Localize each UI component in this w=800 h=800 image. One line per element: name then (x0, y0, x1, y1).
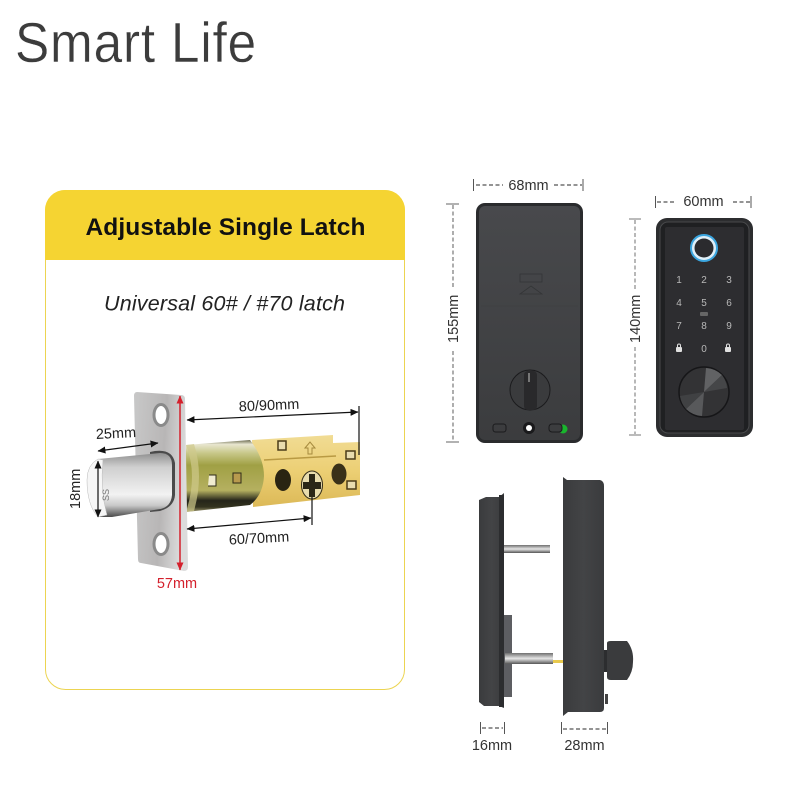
dimension: 16mm (472, 722, 512, 754)
dimension: 68mm (474, 178, 583, 194)
keypad rotary knob (679, 367, 729, 417)
back panel arrow mark (520, 274, 542, 294)
panel: adjustable single latch (45, 190, 405, 690)
keypad lock icons (676, 344, 731, 352)
keypad digits: 4 (676, 298, 682, 309)
dimension: 68mm: 68mm (508, 178, 549, 194)
keypad digits: 9 (726, 321, 732, 332)
panel heading: Adjustable Single Latch (86, 214, 366, 241)
dimension: 28mm (562, 722, 608, 754)
dimension: 80/90mm (187, 397, 359, 455)
keypad digits: 5 (701, 298, 707, 309)
keypad digits (676, 275, 732, 355)
dimension: 28mm: 28mm (564, 738, 605, 754)
keypad digits: 0 (701, 344, 707, 355)
keypad digits: 8 (701, 321, 707, 332)
panel header band (45, 190, 405, 260)
dimension: 60/70mm: 60/70mm (228, 529, 290, 549)
title: Smart Life (15, 12, 256, 75)
back panel body (476, 203, 583, 443)
side view thumb turn half (563, 477, 633, 716)
keypad body (656, 218, 753, 437)
back view of lock (446, 178, 583, 443)
side view of lock (472, 477, 633, 754)
dimension: 155mm: 155mm (446, 295, 462, 343)
dimension: 140mm (628, 219, 644, 435)
latch cylinder (186, 440, 264, 512)
keypad digits: 7 (676, 321, 682, 332)
keypad digits: 6 (726, 298, 732, 309)
dimension: 60mm: 60mm (683, 194, 724, 210)
latch face plate (134, 392, 188, 571)
dimension: 25mm (95, 425, 158, 451)
fingerprint sensor (691, 235, 717, 261)
dimension: 80/90mm: 80/90mm (238, 397, 300, 415)
latch illustration (68, 392, 360, 592)
dimension: 18mm (68, 461, 98, 517)
dimension: 60mm (656, 194, 751, 210)
dimension: 140mm: 140mm (628, 295, 644, 343)
card reader icon (700, 312, 708, 316)
thumb turn (510, 370, 550, 410)
dimension: 25mm: 25mm (95, 425, 137, 443)
dimension: 18mm: 18mm (68, 469, 84, 509)
keypad digits: 2 (701, 275, 707, 286)
dimension: 60/70mm (187, 497, 312, 549)
panel subheading: Universal 60# / #70 latch (104, 292, 345, 316)
latch bolt: SS (101, 489, 111, 501)
side view gold tailpiece (553, 660, 563, 663)
keypad digits: 1 (676, 275, 682, 286)
side view keypad half (479, 493, 553, 708)
back panel buttons and lens (493, 422, 568, 434)
dimension: 155mm (446, 204, 462, 442)
latch bolt (87, 451, 175, 517)
dimension: 16mm: 16mm (472, 738, 512, 754)
keypad digits: 3 (726, 275, 732, 286)
latch gold plate (252, 435, 360, 507)
dimension: 57mm: 57mm (157, 576, 197, 592)
keypad front view of lock (628, 194, 753, 437)
